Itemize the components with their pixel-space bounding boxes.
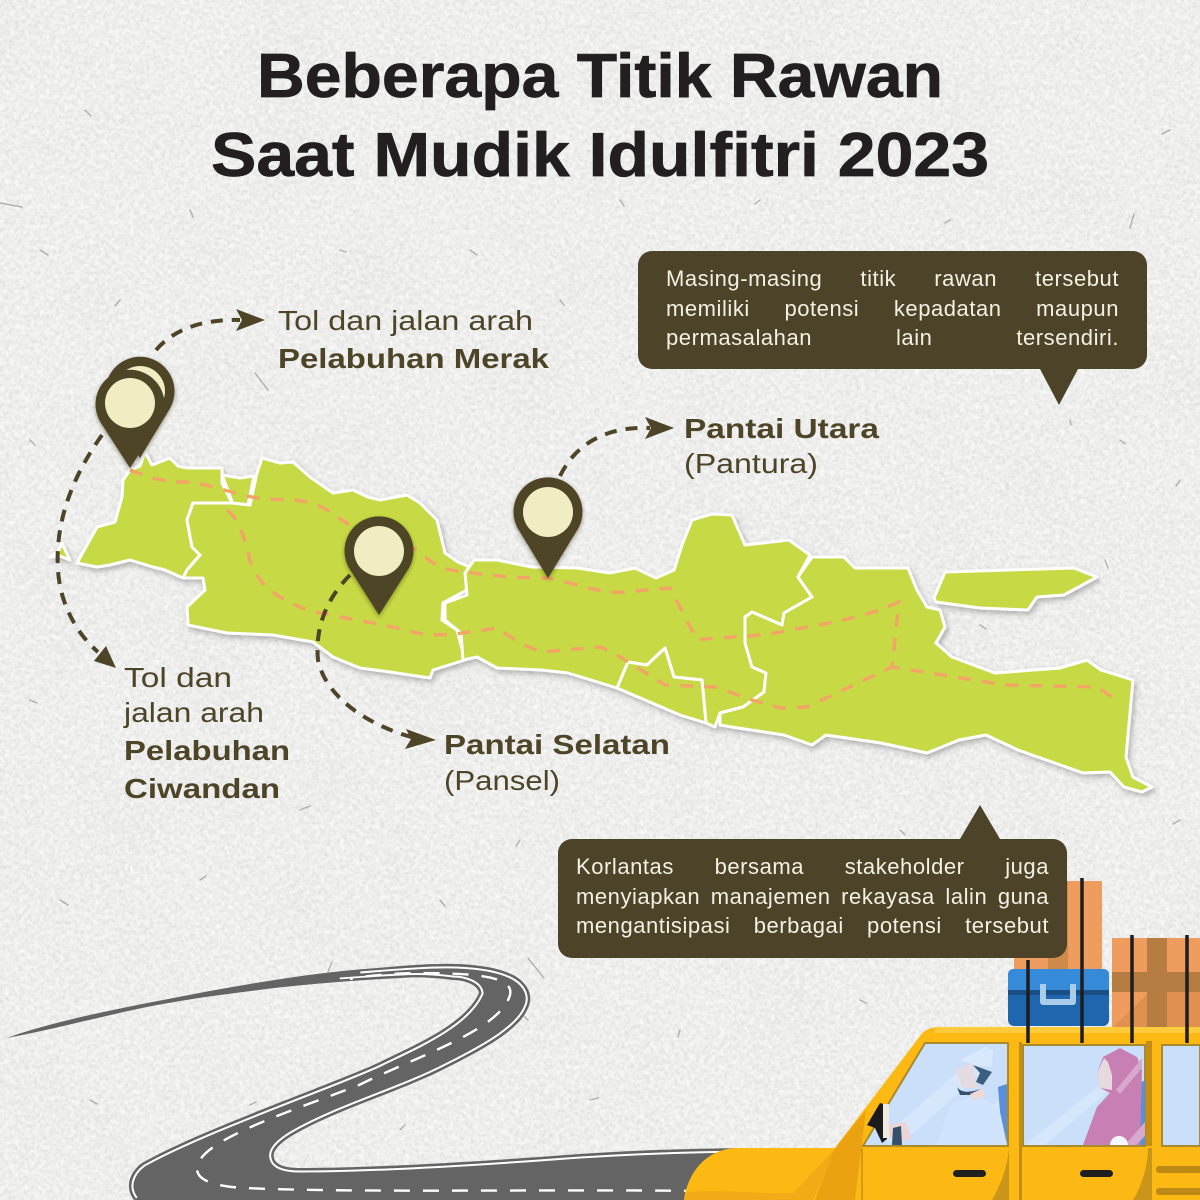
- arrow line: [560, 428, 650, 476]
- middle window: [1023, 1045, 1145, 1146]
- door handle front: [953, 1170, 986, 1177]
- car body: [684, 1027, 1200, 1200]
- callout text: Korlantas bersama stakeholder juga: [576, 854, 1049, 879]
- driver cap: [960, 1047, 993, 1066]
- map: Java island: [50, 452, 1152, 792]
- icon: pin Merak group: [96, 357, 174, 468]
- label bold line 1: Pelabuhan: [124, 735, 290, 766]
- callout text: Masing-masing titik rawan tersebut: [666, 266, 1119, 291]
- title: [211, 42, 989, 190]
- box cross horizontal: [1112, 972, 1200, 992]
- blue case: [1008, 969, 1109, 1026]
- white edge band: [129, 964, 745, 1200]
- label bold line: Pelabuhan Merak: [278, 343, 549, 374]
- driver neck: [970, 1088, 985, 1100]
- roof straps: [1028, 878, 1187, 1043]
- label: Pantai Selatan: [444, 729, 670, 796]
- driver body: [938, 1097, 1006, 1145]
- hijab hand: [1110, 1136, 1128, 1145]
- dashed arrow: Merak: [156, 309, 265, 350]
- callout text: menyiapkan manajemen rekayasa lalin guna: [576, 884, 1049, 909]
- arrow head: [405, 729, 436, 749]
- callout text: [666, 266, 1119, 350]
- wing mirror face: [883, 1104, 889, 1138]
- pin back: [106, 357, 174, 458]
- region: Banten: [77, 452, 232, 578]
- driver arm: [892, 1126, 902, 1145]
- door handle rear: [1080, 1170, 1113, 1177]
- callout tail: [960, 805, 1000, 839]
- callout text: [576, 854, 1049, 938]
- window streaks: [880, 1070, 1007, 1145]
- box shading: [1112, 972, 1200, 1028]
- pin circle: [354, 526, 404, 576]
- passenger hijab: [1083, 1048, 1142, 1145]
- label line 1: Tol dan: [124, 662, 232, 693]
- route lines: [130, 470, 1120, 708]
- dashed arrow: Pantura: [560, 417, 674, 476]
- callout text: permasalahan lain tersendiri.: [666, 325, 1119, 350]
- callout tail: [1040, 369, 1078, 405]
- roof highlight: [935, 1027, 1200, 1033]
- luggage on roof: [1008, 881, 1200, 1028]
- arrow line: [317, 575, 415, 738]
- road: [7, 964, 745, 1200]
- region: Jawa Barat: [183, 458, 470, 678]
- label line 2: jalan arah: [123, 697, 264, 728]
- case handle: [1043, 984, 1073, 1002]
- region: Yogyakarta: [617, 648, 706, 723]
- title line 2: Saat Mudik Idulfitri 2023: [211, 121, 989, 190]
- driver seat: [998, 1084, 1007, 1144]
- callout text: mengantisipasi berbagai potensi tersebut: [576, 913, 1049, 938]
- front door edge: [861, 1148, 863, 1200]
- arrow line: [156, 320, 240, 350]
- window streak: [1025, 1085, 1110, 1145]
- orange box band: [1048, 881, 1068, 971]
- pin body: [514, 477, 582, 578]
- south route: [227, 510, 892, 708]
- north coast route: [130, 470, 1120, 702]
- passenger seat: [1137, 1080, 1145, 1145]
- dashed arrow: Ciwandan: [58, 435, 116, 668]
- label bold line: Pantai Utara: [684, 413, 879, 444]
- region: Jakarta: [222, 475, 254, 505]
- pin back highlight: [115, 366, 165, 416]
- label: Pantai Utara: [684, 413, 879, 479]
- hood shading: [684, 1147, 837, 1200]
- pin body: [345, 516, 413, 615]
- label line: (Pantura): [684, 448, 818, 479]
- dashed arrow: Pansel: [317, 575, 436, 749]
- car: [684, 878, 1200, 1200]
- rear window: [1162, 1045, 1200, 1146]
- wing mirror: [867, 1103, 887, 1143]
- label line: (Pansel): [444, 765, 560, 796]
- label: Pelabuhan Merak: [278, 305, 549, 374]
- region: Jawa Timur: [720, 557, 1152, 792]
- callout: Korlantas: [558, 839, 1067, 958]
- arrow head: [236, 309, 265, 331]
- passenger face: [1097, 1058, 1112, 1090]
- pillar dark: [1019, 1042, 1022, 1200]
- label line: Tol dan jalan arah: [278, 305, 533, 336]
- front window: [863, 1043, 1008, 1146]
- vent 1: [1156, 1166, 1200, 1173]
- pin circle: [523, 487, 573, 537]
- pillar dark 2: [1146, 1041, 1152, 1146]
- region: Merak islet: [50, 543, 70, 560]
- driver mask: [973, 1065, 992, 1085]
- region: Jawa Tengah: [445, 514, 812, 727]
- orange box wide: [1112, 938, 1200, 1028]
- driver hand: [888, 1122, 912, 1142]
- blue case band: [1008, 990, 1109, 995]
- icon: pin Pantai Utara: [514, 477, 582, 578]
- label bold line: Pantai Selatan: [444, 729, 670, 760]
- blue case top: [1008, 969, 1109, 990]
- title line 1: Beberapa Titik Rawan: [257, 42, 943, 111]
- road centre dashes: [197, 973, 700, 1191]
- callout text: memiliki potensi kepadatan maupun: [666, 296, 1119, 321]
- icon: pin Pantai Selatan: [345, 516, 413, 615]
- vent 2: [1156, 1188, 1200, 1195]
- box cross vertical: [1147, 938, 1167, 1028]
- label: Pelabuhan Ciwandan: [123, 662, 290, 804]
- driver face: [955, 1062, 978, 1088]
- hijab shine: [1116, 1058, 1145, 1145]
- pin front: [96, 370, 164, 468]
- door edge shadow: [992, 1148, 1152, 1200]
- road surface: [7, 964, 745, 1200]
- region: Madura: [934, 568, 1097, 610]
- orange box tall: [1014, 881, 1102, 971]
- label bold line 2: Ciwandan: [124, 773, 280, 804]
- arrow head: [94, 646, 116, 668]
- road edge lines: [129, 964, 745, 1200]
- pillar shading: [815, 1110, 866, 1200]
- pin front circle: [105, 378, 155, 428]
- arrow head: [645, 417, 674, 439]
- grey rim: [129, 964, 745, 1200]
- driver beard: [957, 1087, 980, 1095]
- callout: potensi kepadatan: [638, 251, 1147, 369]
- arrow line: [58, 435, 102, 652]
